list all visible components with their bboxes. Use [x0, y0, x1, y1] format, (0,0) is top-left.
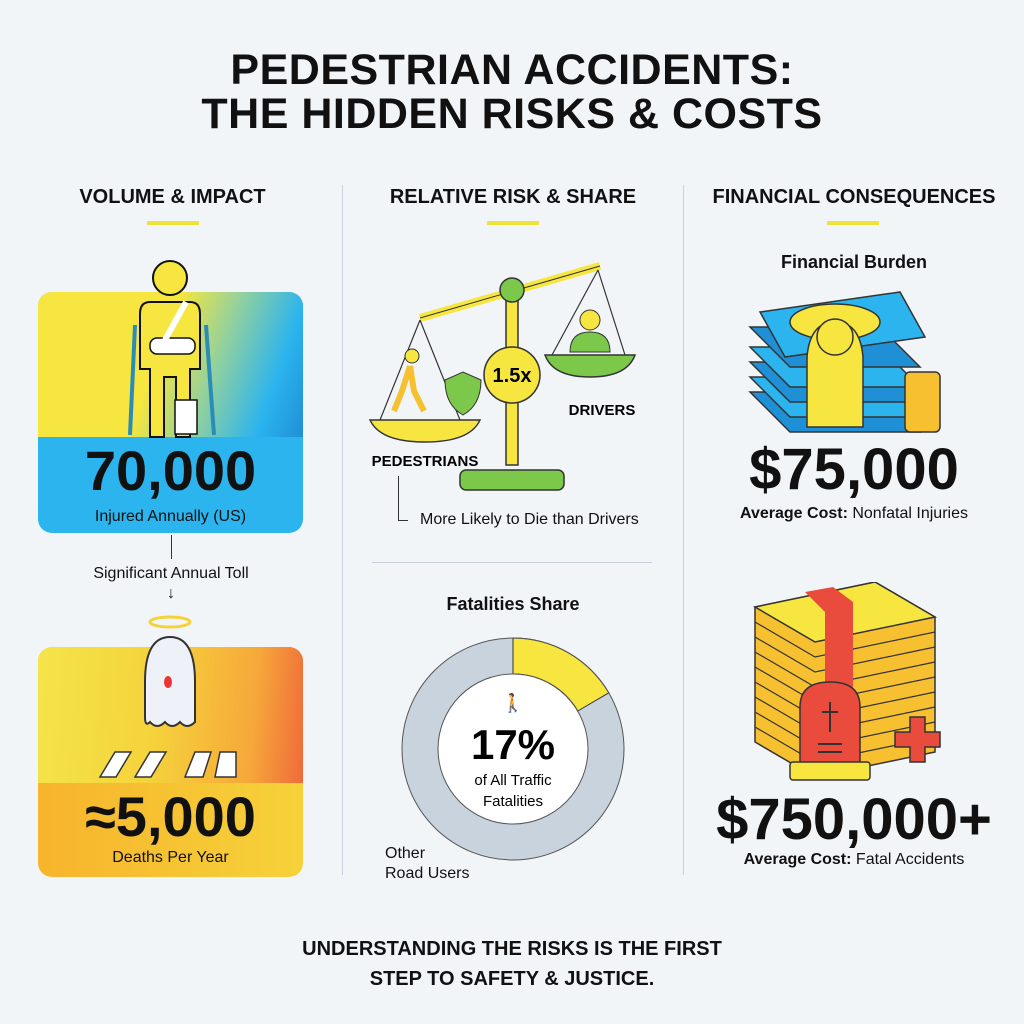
stat: 70,000: 70,000: [85, 439, 256, 502]
title: PEDESTRIAN ACCIDENTS:: [230, 46, 794, 94]
label: other road users: Other: [385, 845, 425, 862]
text: ↓: [167, 585, 175, 602]
heading: volume & impact: VOLUME & IMPACT: [79, 186, 266, 208]
footer: [302, 938, 722, 990]
label: other road users: [385, 845, 469, 882]
scale illustration: PEDESTRIANS: [372, 453, 478, 470]
icon: money stack: [748, 291, 941, 433]
label: other road users: Road Users: [385, 865, 469, 882]
icon: injured person: [128, 260, 216, 438]
donut chart: 17%: [471, 721, 555, 768]
scale illustration: [368, 262, 636, 491]
text: significant annual toll: Significant Annual Toll: [93, 565, 249, 582]
card: injured: Injured Annually (US): [95, 508, 246, 525]
stat: 75,000: $75,000: [749, 437, 959, 502]
scale illustration: DRIVERS: [569, 402, 635, 419]
icon: money stack with tombstone: [753, 582, 941, 781]
card: deaths: Deaths Per Year: [112, 849, 229, 866]
card: injured: [38, 292, 303, 533]
heading: fatalities share: Fatalities Share: [446, 594, 580, 614]
donut chart: 🚶: [502, 692, 524, 713]
scale illustration: 1.5x: [493, 365, 531, 387]
heading: financial: FINANCIAL CONSEQUENCES: [712, 186, 996, 208]
text: More Likely to Die than Drivers: [420, 511, 639, 528]
card: deaths: [38, 647, 303, 877]
donut chart: of All Traffic: [474, 772, 552, 789]
text: Average Cost: Nonfatal Injuries: [740, 505, 968, 522]
stat: 750,000+: $750,000+: [716, 787, 992, 852]
title: THE HIDDEN RISKS & COSTS: [201, 90, 823, 138]
heading: relative risk: RELATIVE RISK & SHARE: [390, 186, 636, 208]
text: Average Cost: Fatal Accidents: [744, 851, 964, 868]
title: [201, 46, 823, 138]
text: more likely: [398, 476, 399, 521]
donut chart: [402, 638, 624, 860]
stat: 5,000: ≈5,000: [85, 785, 256, 848]
footer: STEP TO SAFETY & JUSTICE.: [370, 968, 654, 990]
donut chart: Fatalities: [483, 793, 543, 810]
icon: ghost crosswalk: [98, 616, 237, 778]
footer: UNDERSTANDING THE RISKS IS THE FIRST: [302, 938, 722, 960]
heading: financial burden: Financial Burden: [781, 252, 927, 272]
